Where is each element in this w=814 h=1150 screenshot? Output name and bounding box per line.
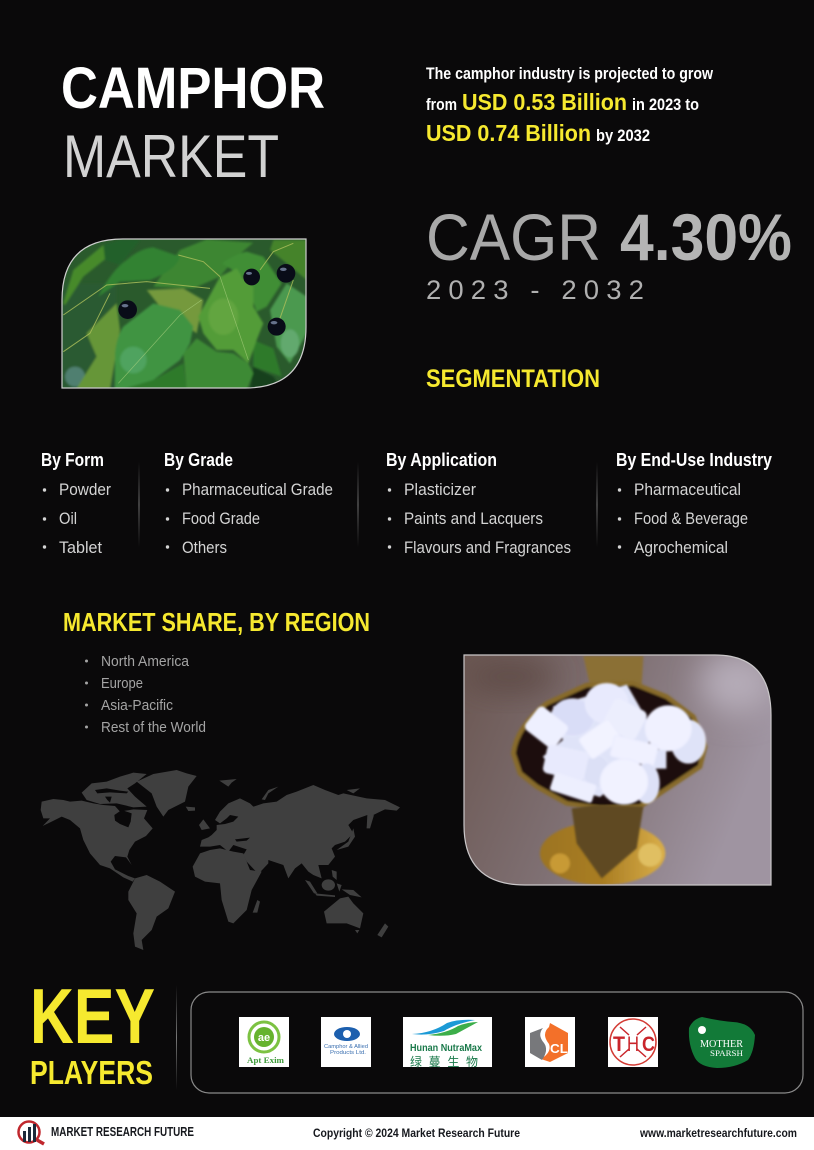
world map	[41, 770, 400, 950]
segment column: by end-use industry: Food & Beverage	[634, 510, 748, 528]
market share heading: MARKET SHARE, BY REGION	[63, 607, 370, 637]
logo: THC	[608, 1017, 658, 1067]
spoon handle	[583, 656, 643, 685]
logo: Apt Exim: Apt Exim	[247, 1055, 284, 1065]
growth projection text: by 2032	[596, 127, 650, 145]
segment column: by grade: Pharmaceutical Grade	[182, 481, 333, 499]
key players heading: KEY	[30, 972, 155, 1060]
growth projection text: The camphor industry is projected to grow	[426, 65, 713, 83]
footer brand name: MARKET RESEARCH FUTURE	[51, 1125, 194, 1139]
spoon leaf tip	[572, 805, 643, 878]
key players heading: PLAYERS	[30, 1054, 153, 1091]
key players heading	[30, 972, 155, 1091]
logo: THC: C	[642, 1033, 655, 1056]
segment column: by application: Flavours and Fragrances	[404, 539, 571, 557]
growth projection text	[426, 65, 713, 146]
CAGR figure: CAGR	[426, 200, 601, 274]
logo: Hunan NutraMax: 绿蔓生物	[410, 1054, 478, 1069]
segmentation heading: SEGMENTATION	[426, 365, 600, 393]
growth projection text: USD 0.53 Billion	[462, 89, 627, 115]
logo: Mother Sparsh: MOTHER	[700, 1039, 743, 1050]
title: camphor: CAMPHOR	[61, 56, 325, 121]
region list: Asia-Pacific	[101, 698, 173, 714]
logo: Camphor & Allied Products	[321, 1017, 371, 1067]
footer bar	[0, 1117, 814, 1150]
icon: market research future logo	[18, 1122, 44, 1144]
segment column: by form: Tablet	[59, 539, 102, 557]
segment column: by end-use industry: Agrochemical	[634, 539, 728, 557]
logo: SCL	[525, 1017, 575, 1067]
camphor tablets	[523, 683, 706, 804]
logo: Mother Sparsh: SPARSH	[710, 1049, 743, 1058]
copyright: Copyright © 2024 Market Research Future	[313, 1126, 520, 1140]
segment column: by grade: Others	[182, 539, 227, 557]
region list: Europe	[101, 676, 143, 692]
image: camphor tree leaves	[60, 237, 308, 392]
logo: Apt Exim: ae	[258, 1032, 270, 1044]
segment column: by application	[386, 450, 571, 557]
title	[61, 56, 325, 190]
growth projection text: USD 0.74 Billion	[426, 120, 591, 146]
region list	[85, 654, 206, 736]
logo: Hunan NutraMax: Hunan NutraMax	[410, 1042, 482, 1054]
segment column: by form: By Form	[41, 450, 104, 470]
logo: THC: H	[627, 1033, 639, 1056]
segment column: by application: Paints and Lacquers	[404, 510, 543, 528]
title: market: MARKET	[63, 123, 279, 190]
CAGR figure: 2023 - 2032	[426, 275, 651, 305]
logo: THC: T	[613, 1033, 625, 1056]
logo: Hunan NutraMax	[403, 1017, 492, 1069]
segment column: by application: Plasticizer	[404, 481, 476, 499]
segment column: by application: By Application	[386, 450, 497, 470]
segment column: by end-use industry: Pharmaceutical	[634, 481, 741, 499]
segment column: by form	[41, 450, 111, 557]
key players panel	[191, 992, 803, 1093]
segment column: by form: Powder	[59, 481, 111, 499]
logo: Camphor & Allied Products: Camphor & Allied	[324, 1044, 368, 1050]
CAGR figure	[426, 200, 792, 305]
spoon bowl	[513, 683, 705, 808]
logo: SCL: CL	[550, 1041, 568, 1056]
segment column: by grade: By Grade	[164, 450, 233, 470]
segment column: by grade	[164, 450, 333, 557]
image: camphor tablets in brass spoon	[463, 653, 773, 887]
logo: Camphor & Allied Products: Products Ltd.	[330, 1050, 367, 1056]
berries	[118, 264, 295, 336]
segment column: by end-use industry: By End-Use Industry	[616, 450, 772, 470]
growth projection text: in 2023 to	[632, 96, 699, 114]
segment column: by grade: Food Grade	[182, 510, 260, 528]
logo: Mother Sparsh	[689, 1017, 755, 1068]
growth projection text: from	[426, 96, 457, 114]
region list: North America	[101, 654, 190, 670]
segment column: by end-use industry	[616, 450, 772, 557]
logo: Apt Exim	[239, 1017, 289, 1067]
brass base	[540, 822, 665, 885]
region list: Rest of the World	[101, 720, 206, 736]
CAGR figure: 4.30%	[620, 200, 792, 274]
segment column: by form: Oil	[59, 510, 77, 528]
